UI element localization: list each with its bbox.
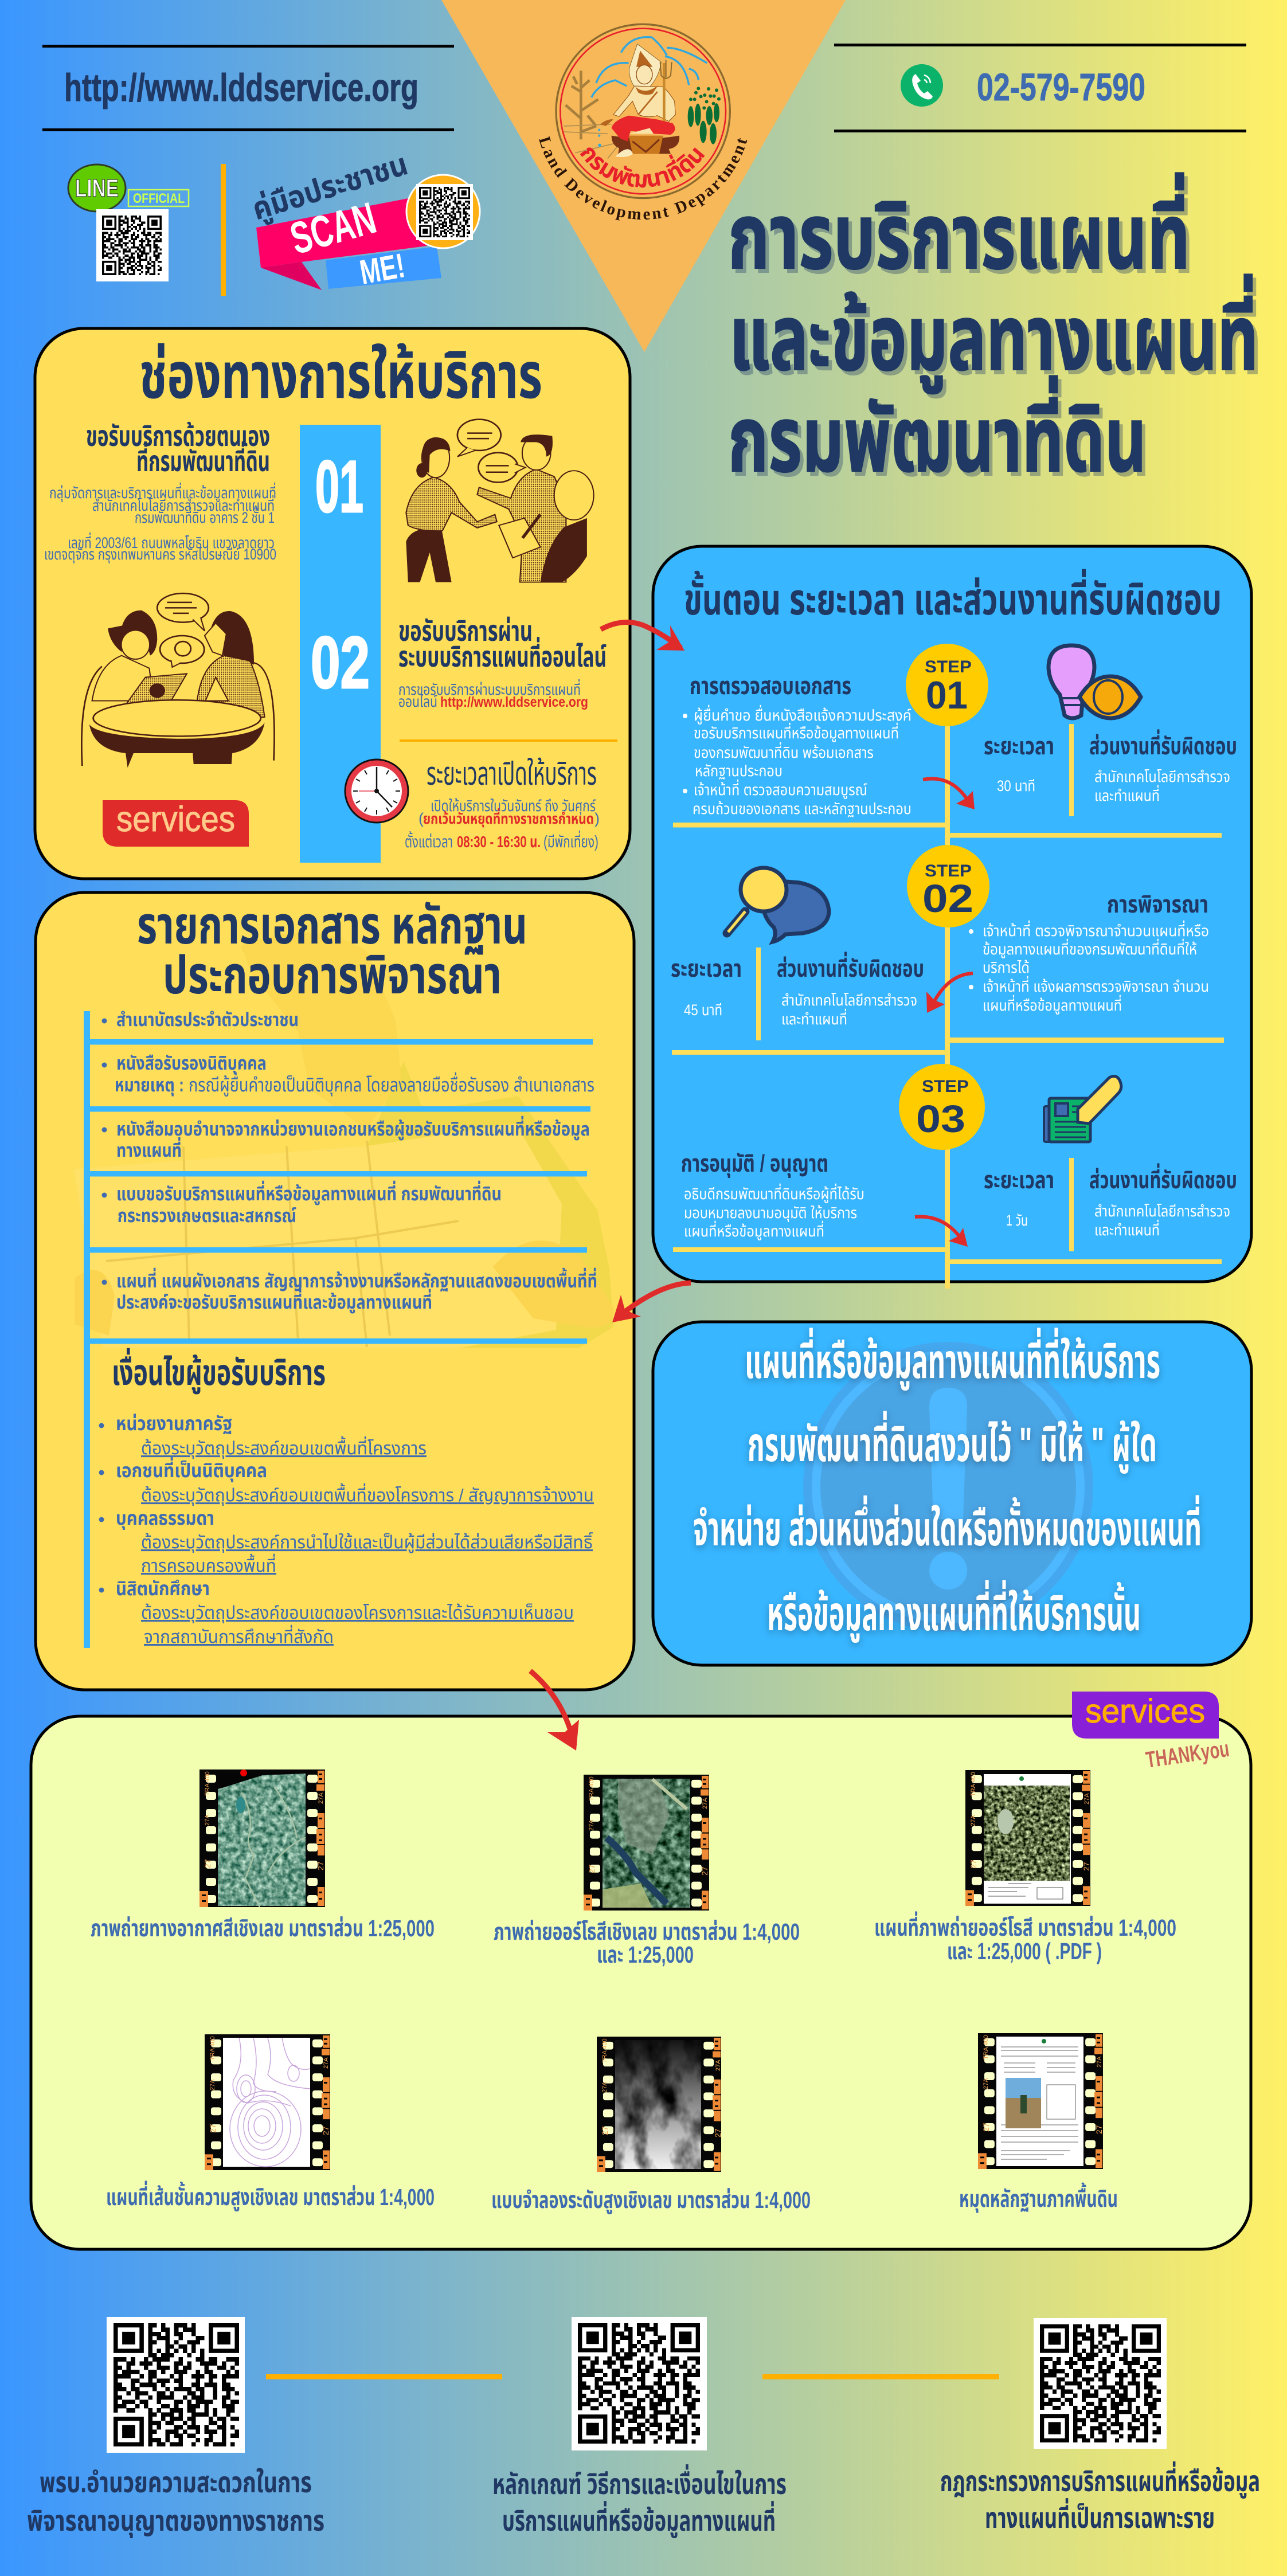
caption 4: แผนที่เส้นชั้นความสูงเชิงเลข มาตราส่วน 1:4,000: [106, 2180, 435, 2211]
channel 01 address: [44, 482, 276, 563]
step 2 description: การพิจารณา: [1107, 891, 1208, 918]
step 1 duration and owner: และทำแผนที่: [1094, 785, 1160, 804]
heading: required documents: [137, 896, 527, 1005]
arrow: step 3 to duration: [915, 1217, 968, 1247]
channel 01 address: สำนักเทคโนโลยีการสำรวจและทำแผนที่: [92, 495, 275, 514]
website address block: http://www.lddservice.org: [64, 66, 418, 109]
document list: แผนที่ แผนผังเอกสาร สัญญาการจ้างงานหรือหลักฐานแสดงขอบเขตพื้นที่ที่: [116, 1267, 597, 1291]
step 3 badge: STEP: [922, 1077, 969, 1096]
film strip 4: [205, 2034, 330, 2170]
film strip 3: 27: [1082, 1862, 1091, 1871]
film strip 2: 27A: [702, 1798, 709, 1809]
conditions list: [99, 1413, 594, 1647]
channel 02 heading: ระบบบริการแผนที่ออนไลน์: [398, 637, 607, 673]
step 2 duration and owner: [671, 952, 924, 1028]
step 2 description: ข้อมูลทางแผนที่ของกรมพัฒนาที่ดินที่ให้: [983, 938, 1197, 958]
document list: แบบขอรับบริการแผนที่หรือข้อมูลทางแผนที่ กรมพัฒนาที่ดิน: [116, 1180, 502, 1205]
step 3 description: อธิบดีกรมพัฒนาที่ดินหรือผู้ที่ได้รับ: [684, 1183, 864, 1203]
film strip 6: 27A: [1096, 2056, 1103, 2068]
caption 3: [874, 1911, 1176, 1964]
step 3: [681, 1064, 1237, 1247]
step 1 description: หลักฐานประกอบ: [695, 762, 783, 780]
illustration: two women at table: [81, 593, 274, 768]
film strip 1: 27A: [318, 1792, 324, 1804]
film strip 4: 27: [208, 2124, 217, 2133]
channel 01 heading: ที่กรมพัฒนาที่ดิน: [136, 441, 270, 477]
phone contact block: 02-579-7590: [977, 66, 1145, 109]
arrow: step 2 to owner: [926, 973, 973, 1013]
step 2 duration and owner: สำนักเทคโนโลยีการสำรวจ: [781, 992, 917, 1009]
film strip 5: [597, 2037, 722, 2172]
caption link 2: [492, 2464, 787, 2538]
step 1 description: ผู้ยื่นคำขอ ยื่นหนังสือแจ้งความประสงค์: [694, 704, 912, 725]
heading: service channels: ช่องทางการให้บริการ: [139, 340, 542, 412]
product 4: contour map: [106, 2034, 435, 2211]
icon: LINE bubble: [68, 165, 126, 212]
icon: document and pencil: [1044, 1076, 1121, 1142]
step 3 duration and owner: และทำแผนที่: [1094, 1219, 1160, 1239]
connector bar right: [762, 2374, 999, 2379]
step 1 duration and owner: ส่วนงานที่รับผิดชอบ: [1089, 729, 1237, 760]
step 2 description: แผนที่หรือข้อมูลทางแผนที่: [983, 995, 1122, 1015]
ribbon: [256, 192, 441, 292]
film strip 3: [965, 1770, 1091, 1906]
ribbon: SCAN: [285, 192, 381, 264]
bottom link 1: [27, 2317, 324, 2538]
product 3: ortho map: [874, 1770, 1176, 1964]
step 2 description: เจ้าหน้าที่ แจ้งผลการตรวจพิจารณา จำนวน: [983, 976, 1209, 995]
conditions list: นิสิตนักศึกษา: [116, 1578, 210, 1600]
step 1 duration and owner: [984, 729, 1237, 804]
panel: service channels: [35, 328, 630, 879]
channel number bar: 01: [315, 446, 363, 528]
document list: กระทรวงเกษตรและสหกรณ์: [118, 1205, 296, 1226]
caption link 1: พรบ.อำนวยความสะดวกในการ: [40, 2467, 312, 2499]
channel 02 description: [398, 679, 588, 710]
QR code 1: [107, 2317, 245, 2453]
step 2 description: เจ้าหน้าที่ ตรวจพิจารณาจำนวนแผนที่หรือ: [983, 920, 1209, 939]
film strip 5: 27: [600, 2126, 609, 2135]
timeline lines: [672, 685, 1224, 1289]
channel 01 address: กลุ่มจัดการและบริการแผนที่และข้อมูลทางแผนที่: [49, 482, 276, 502]
film strip 1: 27A: [204, 1814, 211, 1826]
channel 02 description: การขอรับบริการผ่านระบบบริการแผนที่: [398, 679, 581, 698]
caption 2: และ 1:25,000: [597, 1941, 694, 1968]
film strip 1: [199, 1769, 325, 1907]
step 1: [683, 644, 1237, 817]
arrow: steps to documents: [612, 1283, 691, 1322]
step 2 duration and owner: ส่วนงานที่รับผิดชอบ: [777, 952, 924, 982]
caption 6: หมุดหลักฐานภาคพื้นดิน: [959, 2182, 1118, 2213]
panel: restriction notice: [653, 1322, 1251, 1665]
scan me badge: [248, 147, 480, 292]
conditions list: เอกชนที่เป็นนิติบุคคล: [116, 1457, 267, 1482]
channel number bar: 02: [311, 622, 370, 704]
channel 02 heading: [398, 615, 607, 673]
film strip 1: TRA 400: [204, 1771, 211, 1796]
opening hours: (มีพักเที่ยง): [543, 830, 598, 851]
icon: bulb and eye: [1049, 645, 1141, 718]
logo seal: [555, 23, 731, 199]
document list: หมายเหตุ :: [115, 1074, 184, 1097]
caption 5: แบบจำลองระดับสูงเชิงเลข มาตราส่วน 1:4,000: [491, 2187, 811, 2214]
film strip 6: 27: [981, 2123, 991, 2132]
step 2 badge: 02: [922, 876, 973, 921]
LINE official block: [68, 165, 189, 281]
conditions list: จากสถาบันการศึกษาที่สังกัด: [144, 1624, 334, 1647]
conditions list: ต้องระบุวัตถุประสงค์ขอบเขตพื้นที่ของโครงการ / สัญญาการจ้างงาน: [141, 1483, 594, 1506]
conditions list: ต้องระบุวัตถุประสงค์ขอบเขตของโครงการและได้รับความเห็นชอบ: [141, 1603, 574, 1623]
department logo: [539, 23, 748, 221]
step 2 description: [969, 891, 1209, 1015]
official tag: OFFICIAL: [133, 191, 185, 206]
product 1: aerial photo: [91, 1769, 435, 1941]
bottom link 2: [492, 2317, 787, 2538]
step 3 duration and owner: ส่วนงานที่รับผิดชอบ: [1089, 1163, 1237, 1193]
document list: ประสงค์จะขอรับบริการแผนที่และข้อมูลทางแผนที่: [116, 1289, 432, 1314]
main title: [728, 173, 1258, 491]
film strip 2: 27: [587, 1864, 596, 1873]
caption 3: แผนที่ภาพถ่ายออร์โธสี มาตราส่วน 1:4,000: [874, 1911, 1176, 1941]
caption 2: ภาพถ่ายออร์โธสีเชิงเลข มาตราส่วน 1:4,000: [494, 1919, 800, 1945]
step 2 duration and owner: 45 นาที: [684, 1001, 722, 1019]
caption link 1: [27, 2467, 324, 2538]
arrow: step 1 to duration: [923, 779, 975, 809]
step 2 duration and owner: ระยะเวลา: [671, 955, 742, 982]
ribbon: ME!: [357, 246, 408, 292]
document list: กรณีผู้ยื่นคำขอเป็นนิติบุคคล โดยลงลายมือชื่อรับรอง สำเนาเอกสาร: [189, 1072, 594, 1097]
thank you note: THANKyou: [1144, 1736, 1231, 1773]
heading: required documents: รายการเอกสาร หลักฐาน: [137, 896, 527, 955]
step 1 description: เจ้าหน้าที่ ตรวจสอบความสมบูรณ์: [694, 779, 867, 799]
step 1 description: ของกรมพัฒนาที่ดิน พร้อมเอกสาร: [694, 742, 874, 761]
heading: applicant conditions: เงื่อนไขผู้ขอรับบริการ: [112, 1348, 326, 1395]
step 3 duration and owner: ระยะเวลา: [984, 1166, 1054, 1193]
product 2: ortho photo: [494, 1775, 800, 1968]
conditions list: การครอบครองพื้นที่: [141, 1553, 276, 1576]
channel 01 heading: [86, 420, 270, 477]
opening hours: เปิดให้บริการในวันจันทร์ ถึง วันศุกร์: [431, 797, 596, 815]
step 3 description: [681, 1150, 864, 1240]
icon: clock: [345, 760, 408, 823]
scan QR code: [406, 175, 480, 248]
website address block: [42, 45, 454, 131]
opening hours: ): [594, 810, 600, 827]
film strip 2: 27A: [588, 1819, 595, 1831]
film strip 5: 27A: [601, 2081, 608, 2093]
caption link 3: [940, 2461, 1260, 2534]
conditions list: ต้องระบุวัตถุประสงค์ขอบเขตพื้นที่โครงการ: [141, 1436, 427, 1459]
icon: exclamation watermark: [803, 1342, 1093, 1632]
LINE QR code: [96, 209, 169, 281]
step 2 duration and owner: และทำแผนที่: [781, 1008, 847, 1028]
film strip 5: TRA 400: [601, 2038, 608, 2063]
heading: required documents: ประกอบการพิจารณา: [163, 946, 502, 1005]
step 2 description: บริการได้: [983, 959, 1030, 976]
caption 2: [494, 1919, 800, 1968]
QR code 2: [572, 2317, 707, 2450]
film strip 4: 27: [321, 2126, 330, 2135]
list frame lines: [84, 1011, 593, 1648]
step 3 badge: 03: [916, 1098, 965, 1141]
opening hours: ตั้งแต่เวลา: [405, 831, 453, 851]
channel 01 address: กรมพัฒนาที่ดิน อาคาร 2 ชั้น 1: [135, 507, 275, 526]
step 1 badge: STEP: [925, 657, 972, 676]
film strip 3: TRA 400: [970, 1772, 977, 1796]
icon: magnifier and chat: [727, 868, 829, 942]
step 2: [671, 845, 1209, 1028]
film strip 4: 27A: [209, 2079, 216, 2090]
film strip 6: 27A: [983, 2078, 989, 2089]
film strip 2: 27: [700, 1866, 709, 1876]
step 1 description: การตรวจสอบเอกสาร: [690, 672, 851, 699]
film strip 3: 27A: [1083, 1793, 1090, 1804]
film strip 6: 27: [1094, 2125, 1104, 2134]
notice text: [693, 1328, 1202, 1643]
step 1 description: ครบถ้วนของเอกสาร และหลักฐานประกอบ: [693, 800, 912, 817]
document list: หนังสือรับรองนิติบุคคล: [116, 1052, 267, 1075]
panel: map products: [31, 1692, 1251, 2249]
arrow: service channels to steps: [601, 623, 684, 651]
film strip 1: 27: [316, 1861, 325, 1870]
conditions list: หน่วยงานภาครัฐ: [116, 1413, 232, 1435]
bottom link 3: [940, 2318, 1260, 2534]
caption link 2: บริการแผนที่หรือข้อมูลทางแผนที่: [502, 2501, 776, 2538]
logo banner triangle: [441, 0, 846, 352]
film strip 4: 27A: [323, 2057, 330, 2069]
panel: required documents: [36, 892, 634, 1690]
connector bar left: [266, 2374, 502, 2379]
film strip 1: 27: [203, 1859, 212, 1868]
conditions list: บุคคลธรรมดา: [116, 1508, 214, 1530]
film strip 5: 27: [713, 2128, 722, 2137]
channel 02 description: http://www.lddservice.org: [440, 694, 588, 710]
film strip 6: TRA 400: [983, 2035, 989, 2060]
opening hours: (: [418, 810, 424, 827]
document list: [102, 1009, 597, 1314]
step 1 badge: [906, 644, 988, 726]
product 5: elevation model: [491, 2037, 811, 2214]
document list: ทางแผนที่: [116, 1137, 182, 1161]
illustration: three people talking: [406, 420, 594, 582]
film strip 5: 27A: [715, 2060, 722, 2071]
step 2 badge: STEP: [925, 862, 972, 880]
step 1 description: ขอรับบริการแผนที่หรือข้อมูลทางแผนที่: [694, 722, 899, 742]
opening hours: 08:30 - 16:30 น.: [457, 833, 541, 851]
step 3 description: มอบหมายลงนามอนุมัติ ให้บริการ: [684, 1204, 857, 1222]
film strip 3: 27A: [970, 1815, 977, 1826]
step 3 badge: [899, 1064, 985, 1150]
caption 1: ภาพถ่ายทางอากาศสีเชิงเลข มาตราส่วน 1:25,000: [91, 1915, 435, 1941]
step 1 badge: 01: [926, 674, 968, 717]
caption 3: และ 1:25,000 ( .PDF ): [947, 1938, 1102, 1964]
channel number bar: [300, 425, 381, 863]
film strip 3: 27: [969, 1859, 978, 1869]
step 1 duration and owner: สำนักเทคโนโลยีการสำรวจ: [1094, 768, 1230, 785]
step 1 description: [683, 672, 912, 817]
step 3 description: แผนที่หรือข้อมูลทางแผนที่: [684, 1220, 824, 1240]
film strip 2: [584, 1775, 709, 1911]
step 3 duration and owner: [984, 1163, 1237, 1239]
step 3 duration and owner: 1 วัน: [1006, 1212, 1028, 1229]
watermark illustration: [74, 933, 613, 1348]
QR code 3: [1034, 2318, 1167, 2449]
step 1 duration and owner: 30 นาที: [997, 777, 1035, 794]
channel 01 heading: ขอรับบริการด้วยตนเอง: [86, 420, 270, 452]
channel 01 address: เลขที่ 2003/61 ถนนพหลโยธิน แขวงลาดยาว: [68, 532, 275, 551]
conditions list: ต้องระบุวัตถุประสงค์การนำไปใช้และเป็นผู้มีส่วนได้ส่วนเสียหรือมีสิทธิ์: [141, 1532, 593, 1553]
citizen manual label: คู่มือประชาชน: [248, 147, 412, 228]
logo red Thai name: กรมพัฒนาที่ดิน: [580, 147, 705, 188]
caption link 2: หลักเกณฑ์ วิธีการและเงื่อนไขในการ: [492, 2464, 787, 2500]
opening hours: [405, 755, 600, 851]
panel: steps: [653, 546, 1251, 1289]
button: services red: services: [116, 800, 235, 839]
opening hours: ยกเว้นวันหยุดที่ทางราชการกำหนด: [423, 808, 594, 828]
vertical divider: [221, 164, 226, 296]
product 6: ground control form: [959, 2033, 1118, 2213]
step 3 duration and owner: สำนักเทคโนโลยีการสำรวจ: [1094, 1203, 1230, 1220]
document list: หนังสือมอบอำนาจจากหน่วยงานเอกชนหรือผู้ขอรับบริการแผนที่หรือข้อมูล: [116, 1115, 590, 1141]
channel 02 heading: ขอรับบริการผ่าน: [398, 615, 533, 647]
step 3 description: การอนุมัติ / อนุญาต: [681, 1150, 828, 1178]
channel 02 description: ออนไลน์: [398, 693, 437, 710]
film strip 4: TRA 400: [209, 2036, 216, 2061]
caption link 1: พิจารณาอนุญาตของทางราชการ: [27, 2505, 324, 2538]
icon: LINE bubble: LINE: [75, 174, 119, 202]
button: services purple: services: [1085, 1693, 1205, 1730]
film strip 6: [978, 2033, 1104, 2169]
opening hours: ระยะเวลาเปิดให้บริการ: [427, 755, 597, 792]
document list: สำเนาบัตรประจำตัวประชาชน: [116, 1009, 299, 1030]
step 1 duration and owner: ระยะเวลา: [984, 733, 1054, 760]
phone contact block: [834, 44, 1246, 132]
step 2 badge: [907, 845, 989, 927]
arrow: documents to map products: [530, 1671, 579, 1751]
button: services purple: [1072, 1692, 1219, 1739]
film strip 2: TRA 400: [588, 1776, 595, 1801]
channel 01 address: เขตจตุจักร กรุงเทพมหานคร รหัสไปรษณีย์ 10900: [44, 546, 276, 563]
logo English arc text: Land Development Department: [539, 135, 748, 221]
